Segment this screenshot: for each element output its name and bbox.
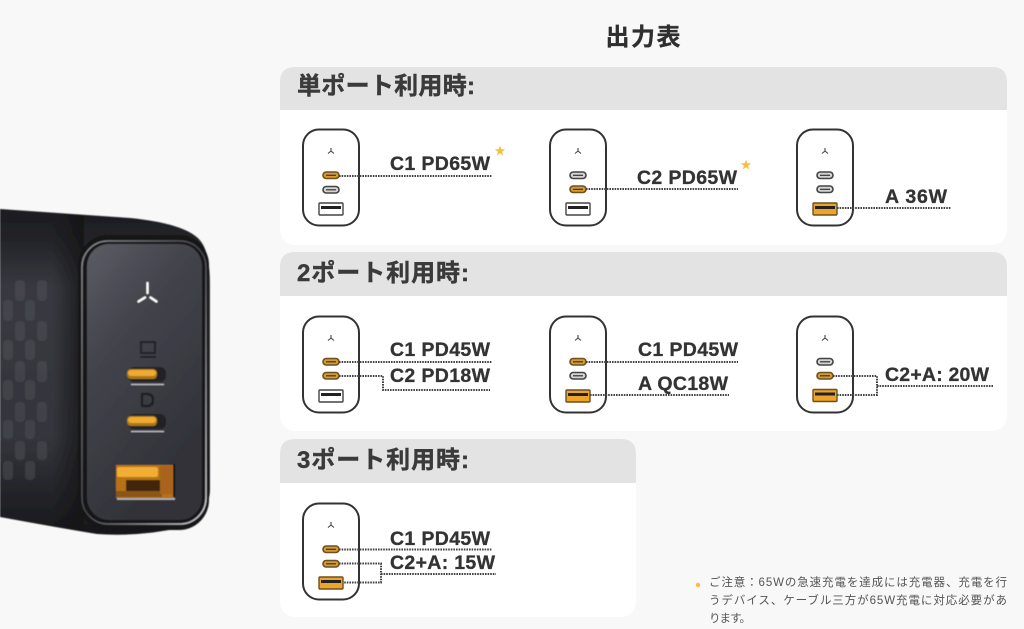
- face plate: [87, 244, 202, 520]
- icon: laptop: [140, 342, 156, 357]
- icon: star: [495, 146, 505, 156]
- panel background: [280, 439, 636, 617]
- icon: star: [741, 160, 751, 170]
- heading: 3ポート利用時:: [297, 447, 469, 474]
- port: C2: [127, 414, 166, 432]
- product photo: charger: [0, 209, 210, 535]
- panel background: [280, 67, 1007, 245]
- heading: 単ポート利用時:: [297, 73, 475, 100]
- diagram: C2 PD65W: [550, 130, 751, 226]
- heading: 2ポート利用時:: [297, 260, 469, 287]
- icon: phone P: [142, 393, 153, 407]
- face bezel: [78, 235, 209, 530]
- diagram: C1 PD45W + C2+A 15W: C1 PD45W: [390, 528, 491, 550]
- panel: three ports: [280, 439, 636, 617]
- panel header band: [280, 67, 1007, 110]
- diagram: C2 PD65W: C2 PD65W: [637, 167, 738, 189]
- body shade: [52, 213, 84, 531]
- note: ります。: [709, 612, 751, 625]
- charger body: [0, 209, 210, 535]
- port: C1: [127, 367, 166, 384]
- icon: note star: [696, 583, 700, 587]
- diagram: C1 PD45W + C2+A 15W: [303, 504, 496, 600]
- diagram: C1 PD45W + C2 PD18W: C1 PD45W: [390, 339, 491, 361]
- panel background: [280, 252, 1007, 431]
- title: 出力表: [606, 24, 680, 51]
- panel header band: [280, 439, 636, 483]
- note: うデバイス、ケーブル三方が65W充電に対応必要があ: [709, 593, 1007, 607]
- panel: two ports: [280, 252, 1007, 431]
- dimple pattern: [3, 280, 47, 480]
- panel: single port: [280, 67, 1007, 245]
- diagram: C2+A 20W: C2+A: 20W: [885, 364, 990, 386]
- port: USB-A: [116, 464, 175, 499]
- diagram: C1 PD45W + C2 PD18W: [303, 316, 492, 412]
- diagram: A 36W: A 36W: [885, 186, 948, 208]
- note: ご注意：65Wの急速充電を達成には充電器、充電を行: [709, 575, 1007, 589]
- diagram: C2+A 20W: [797, 316, 994, 412]
- diagram: C1 PD45W + C2+A 15W: C2+A: 15W: [390, 552, 496, 574]
- diagram: A 36W: [797, 130, 951, 226]
- diagram: C1 PD45W + C2 PD18W: C2 PD18W: [390, 365, 491, 387]
- diagram: C1 PD45W + A QC18W: C1 PD45W: [638, 339, 739, 361]
- panel header band: [280, 252, 1007, 296]
- diagram: C1 PD65W: C1 PD65W: [390, 153, 491, 175]
- diagram: C1 PD45W + A QC18W: [550, 316, 739, 412]
- diagram: C1 PD45W + A QC18W: A QC18W: [638, 373, 729, 395]
- note: [696, 575, 1007, 625]
- icon: logo: [138, 283, 156, 302]
- diagram: C1 PD65W: [303, 130, 505, 226]
